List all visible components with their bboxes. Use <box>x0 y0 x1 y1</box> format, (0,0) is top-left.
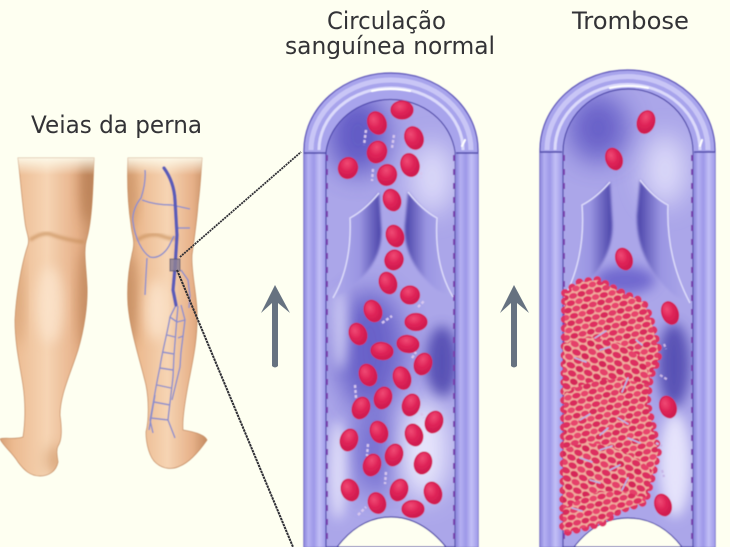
title: circulação sanguínea normal: Circulação <box>327 7 446 35</box>
vessel lumen <box>326 99 455 547</box>
vein: highlighted section <box>170 259 180 271</box>
title: circulação sanguínea normal <box>285 7 495 60</box>
vessel wall dashed lining <box>327 155 454 547</box>
valve: left leaflet <box>563 182 612 300</box>
vessel bottom opening <box>337 517 446 547</box>
platelets <box>656 344 668 477</box>
valve: right leaflet <box>405 192 453 297</box>
leg: right, with veins <box>125 155 207 468</box>
zoom line: lower <box>177 270 293 547</box>
vessel wall <box>304 73 478 547</box>
veins: superficial network <box>133 170 190 438</box>
leg: left, no veins <box>0 147 100 476</box>
vessel wall dashed lining <box>564 155 692 547</box>
thrombus: blood clot <box>563 280 658 532</box>
arrow: flow, normal vessel <box>261 285 290 368</box>
red blood cells <box>336 101 446 518</box>
vessel bottom opening <box>574 518 682 547</box>
red blood cells <box>603 108 681 518</box>
title: circulação sanguínea normal: sanguínea normal <box>285 32 495 60</box>
vessel wall <box>540 70 715 547</box>
title: veias da perna: Veias da perna <box>31 111 202 139</box>
panel: thrombosis vessel <box>540 70 715 547</box>
vessel lumen <box>563 89 693 547</box>
arrow: flow, thrombosis vessel <box>500 285 529 368</box>
zoom line: upper <box>180 152 301 257</box>
panel: normal circulation vessel <box>304 73 478 547</box>
vein: main deep vessel <box>164 168 177 305</box>
title: trombose: Trombose <box>571 7 689 35</box>
valve: right leaflet <box>637 180 690 303</box>
valve: left leaflet <box>333 193 381 298</box>
platelets <box>355 130 425 515</box>
